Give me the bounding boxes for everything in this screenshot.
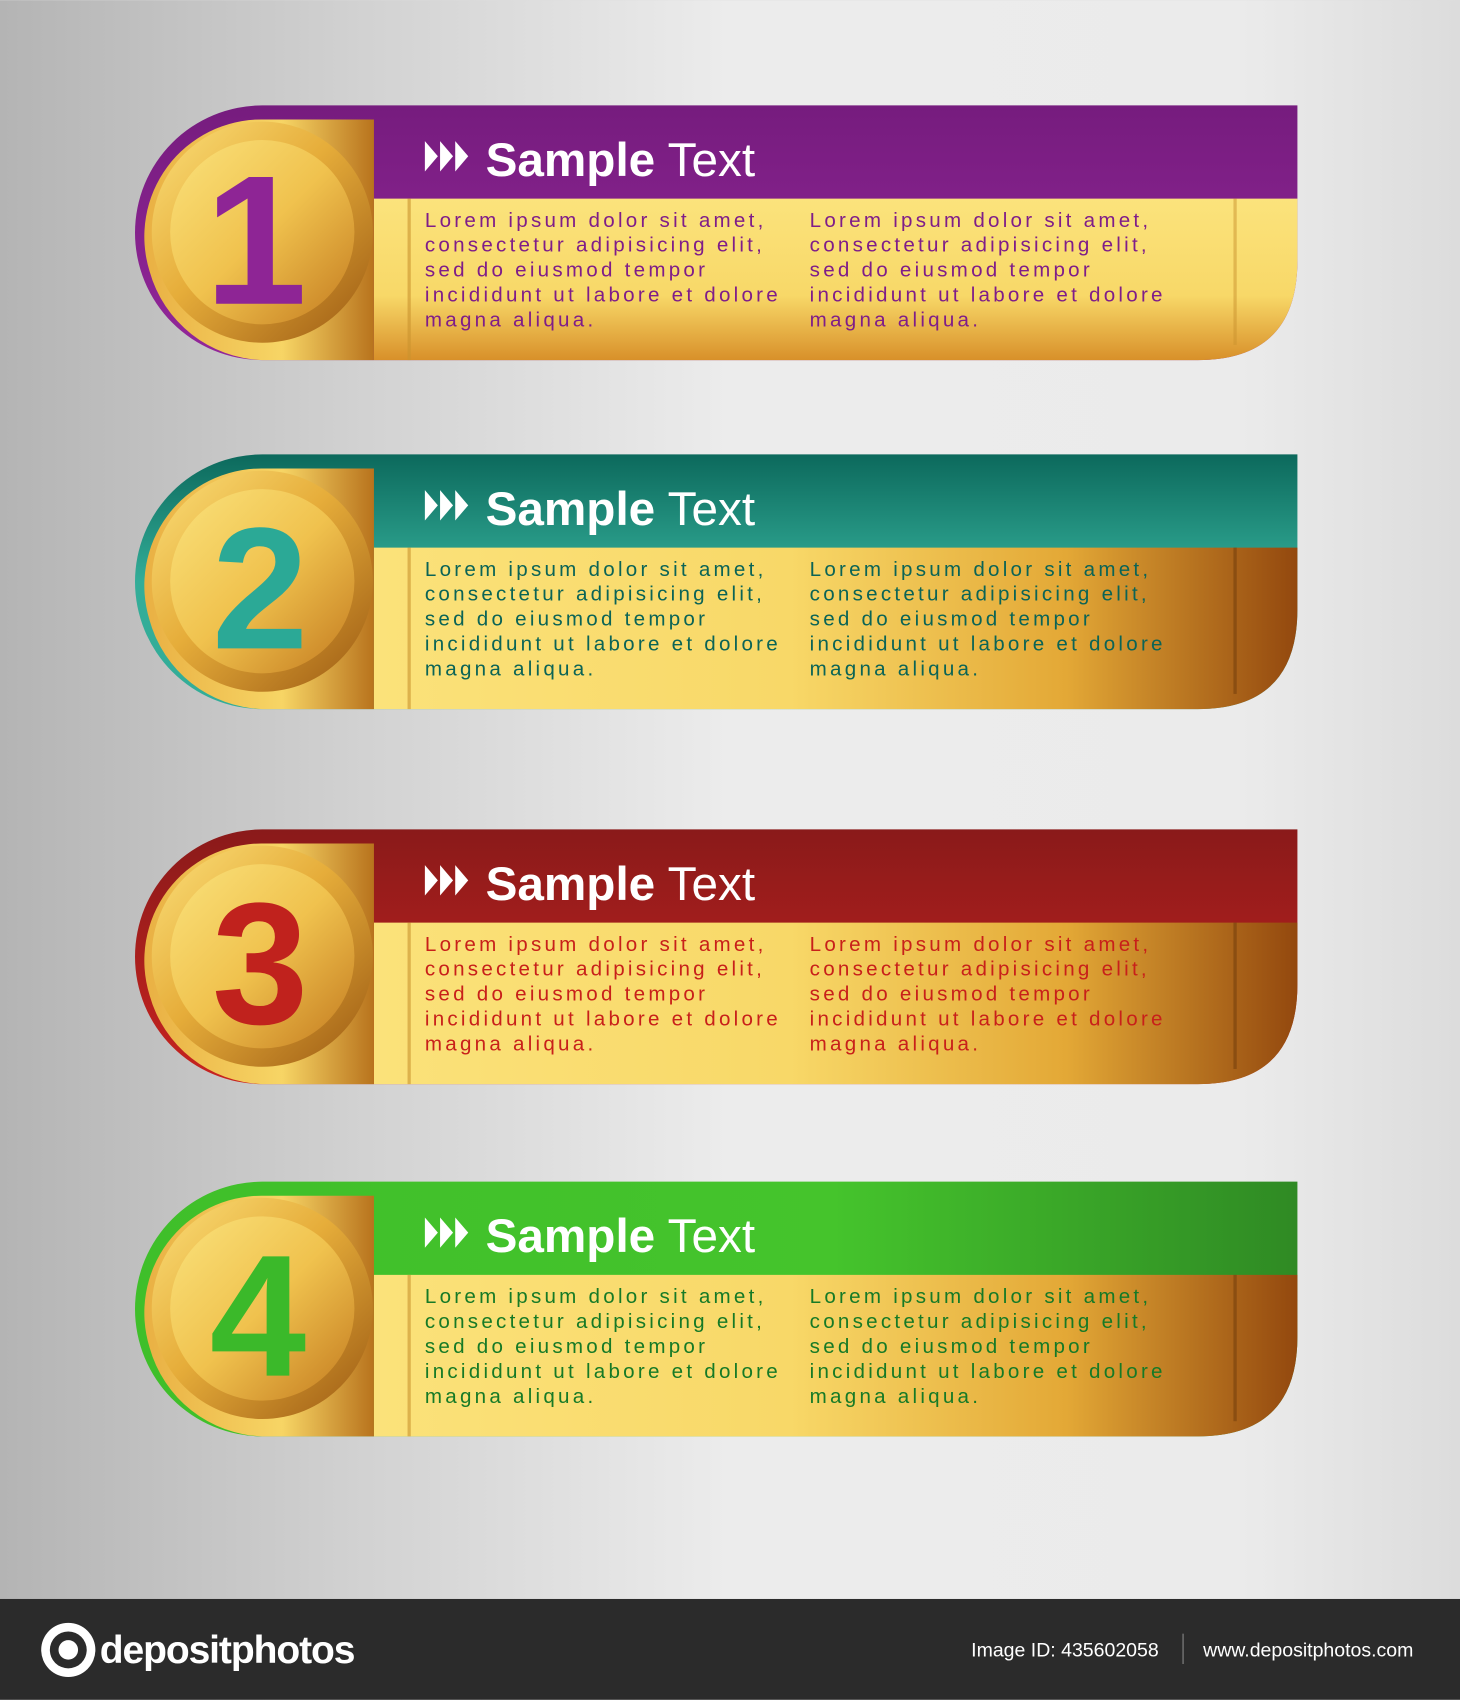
text 2: consectetur adipisicing elit, <box>425 583 765 606</box>
text 4: consectetur adipisicing elit, <box>810 1310 1150 1333</box>
text 3: sed do eiusmod tempor <box>810 983 1093 1006</box>
website: www.depositphotos.com <box>1202 1639 1413 1661</box>
header 1: Sample Text <box>486 134 755 187</box>
text 1: sed do eiusmod tempor <box>810 259 1093 282</box>
text 4: Lorem ipsum dolor sit amet, <box>810 1285 1151 1308</box>
text 4: Lorem ipsum dolor sit amet, <box>425 1285 767 1308</box>
text 2: incididunt ut labore et dolore <box>425 633 781 656</box>
text 3: Lorem ipsum dolor sit amet, <box>425 933 767 956</box>
coin 1 <box>152 122 373 344</box>
coin 4 <box>152 1198 373 1419</box>
text 4: magna aliqua. <box>425 1385 596 1408</box>
text 4: incididunt ut labore et dolore <box>810 1360 1166 1383</box>
text 2: Lorem ipsum dolor sit amet, <box>425 558 767 581</box>
text 3: magna aliqua. <box>425 1033 596 1056</box>
text 1: Lorem ipsum dolor sit amet, <box>425 209 767 232</box>
logo text: depositphotos <box>100 1629 355 1672</box>
banner 1 <box>135 105 1297 360</box>
text 1: consectetur adipisicing elit, <box>810 234 1150 257</box>
text 2: magna aliqua. <box>425 657 596 680</box>
coin 3 <box>152 846 373 1067</box>
text 4: sed do eiusmod tempor <box>810 1335 1093 1358</box>
text 2 <box>425 558 1166 680</box>
text 3: sed do eiusmod tempor <box>425 983 708 1006</box>
text 3: incididunt ut labore et dolore <box>810 1008 1166 1031</box>
coin 1: 1 <box>205 138 307 344</box>
text 1: magna aliqua. <box>425 308 596 331</box>
text 2: sed do eiusmod tempor <box>425 608 708 631</box>
coin 2 <box>152 471 373 692</box>
text 3 <box>425 933 1166 1056</box>
text 3: consectetur adipisicing elit, <box>810 958 1150 981</box>
text 1: sed do eiusmod tempor <box>425 259 708 282</box>
banner 2 <box>135 454 1297 709</box>
header 4: Sample Text <box>486 1210 755 1263</box>
coin 3: 3 <box>212 866 308 1060</box>
header 3: Sample Text <box>486 858 755 911</box>
text 3: Lorem ipsum dolor sit amet, <box>810 933 1151 956</box>
text 4: magna aliqua. <box>810 1385 981 1408</box>
text 1: incididunt ut labore et dolore <box>425 284 781 307</box>
text 3: incididunt ut labore et dolore <box>425 1008 781 1031</box>
image id: Image ID: 435602058 <box>971 1639 1159 1661</box>
text 3: magna aliqua. <box>810 1033 981 1056</box>
banner 3 <box>135 829 1297 1084</box>
coin 4: 4 <box>210 1219 306 1413</box>
text 1: consectetur adipisicing elit, <box>425 234 765 257</box>
text 1: magna aliqua. <box>810 308 981 331</box>
icon: logo <box>41 1623 95 1677</box>
text 4: sed do eiusmod tempor <box>425 1335 708 1358</box>
text 4: incididunt ut labore et dolore <box>425 1360 781 1383</box>
coin 2: 2 <box>212 491 308 685</box>
text 2: magna aliqua. <box>810 657 981 680</box>
text 2: sed do eiusmod tempor <box>810 608 1093 631</box>
text 1: incididunt ut labore et dolore <box>810 284 1166 307</box>
text 1: Lorem ipsum dolor sit amet, <box>810 209 1151 232</box>
text 3: consectetur adipisicing elit, <box>425 958 765 981</box>
text 2: Lorem ipsum dolor sit amet, <box>810 558 1151 581</box>
footer bar <box>0 1599 1460 1700</box>
text 2: consectetur adipisicing elit, <box>810 583 1150 606</box>
text 4: consectetur adipisicing elit, <box>425 1310 765 1333</box>
text 1 <box>425 209 1166 331</box>
text 4 <box>425 1285 1166 1408</box>
banner 4 <box>135 1182 1297 1436</box>
text 2: incididunt ut labore et dolore <box>810 633 1166 656</box>
header 2: Sample Text <box>486 483 755 536</box>
